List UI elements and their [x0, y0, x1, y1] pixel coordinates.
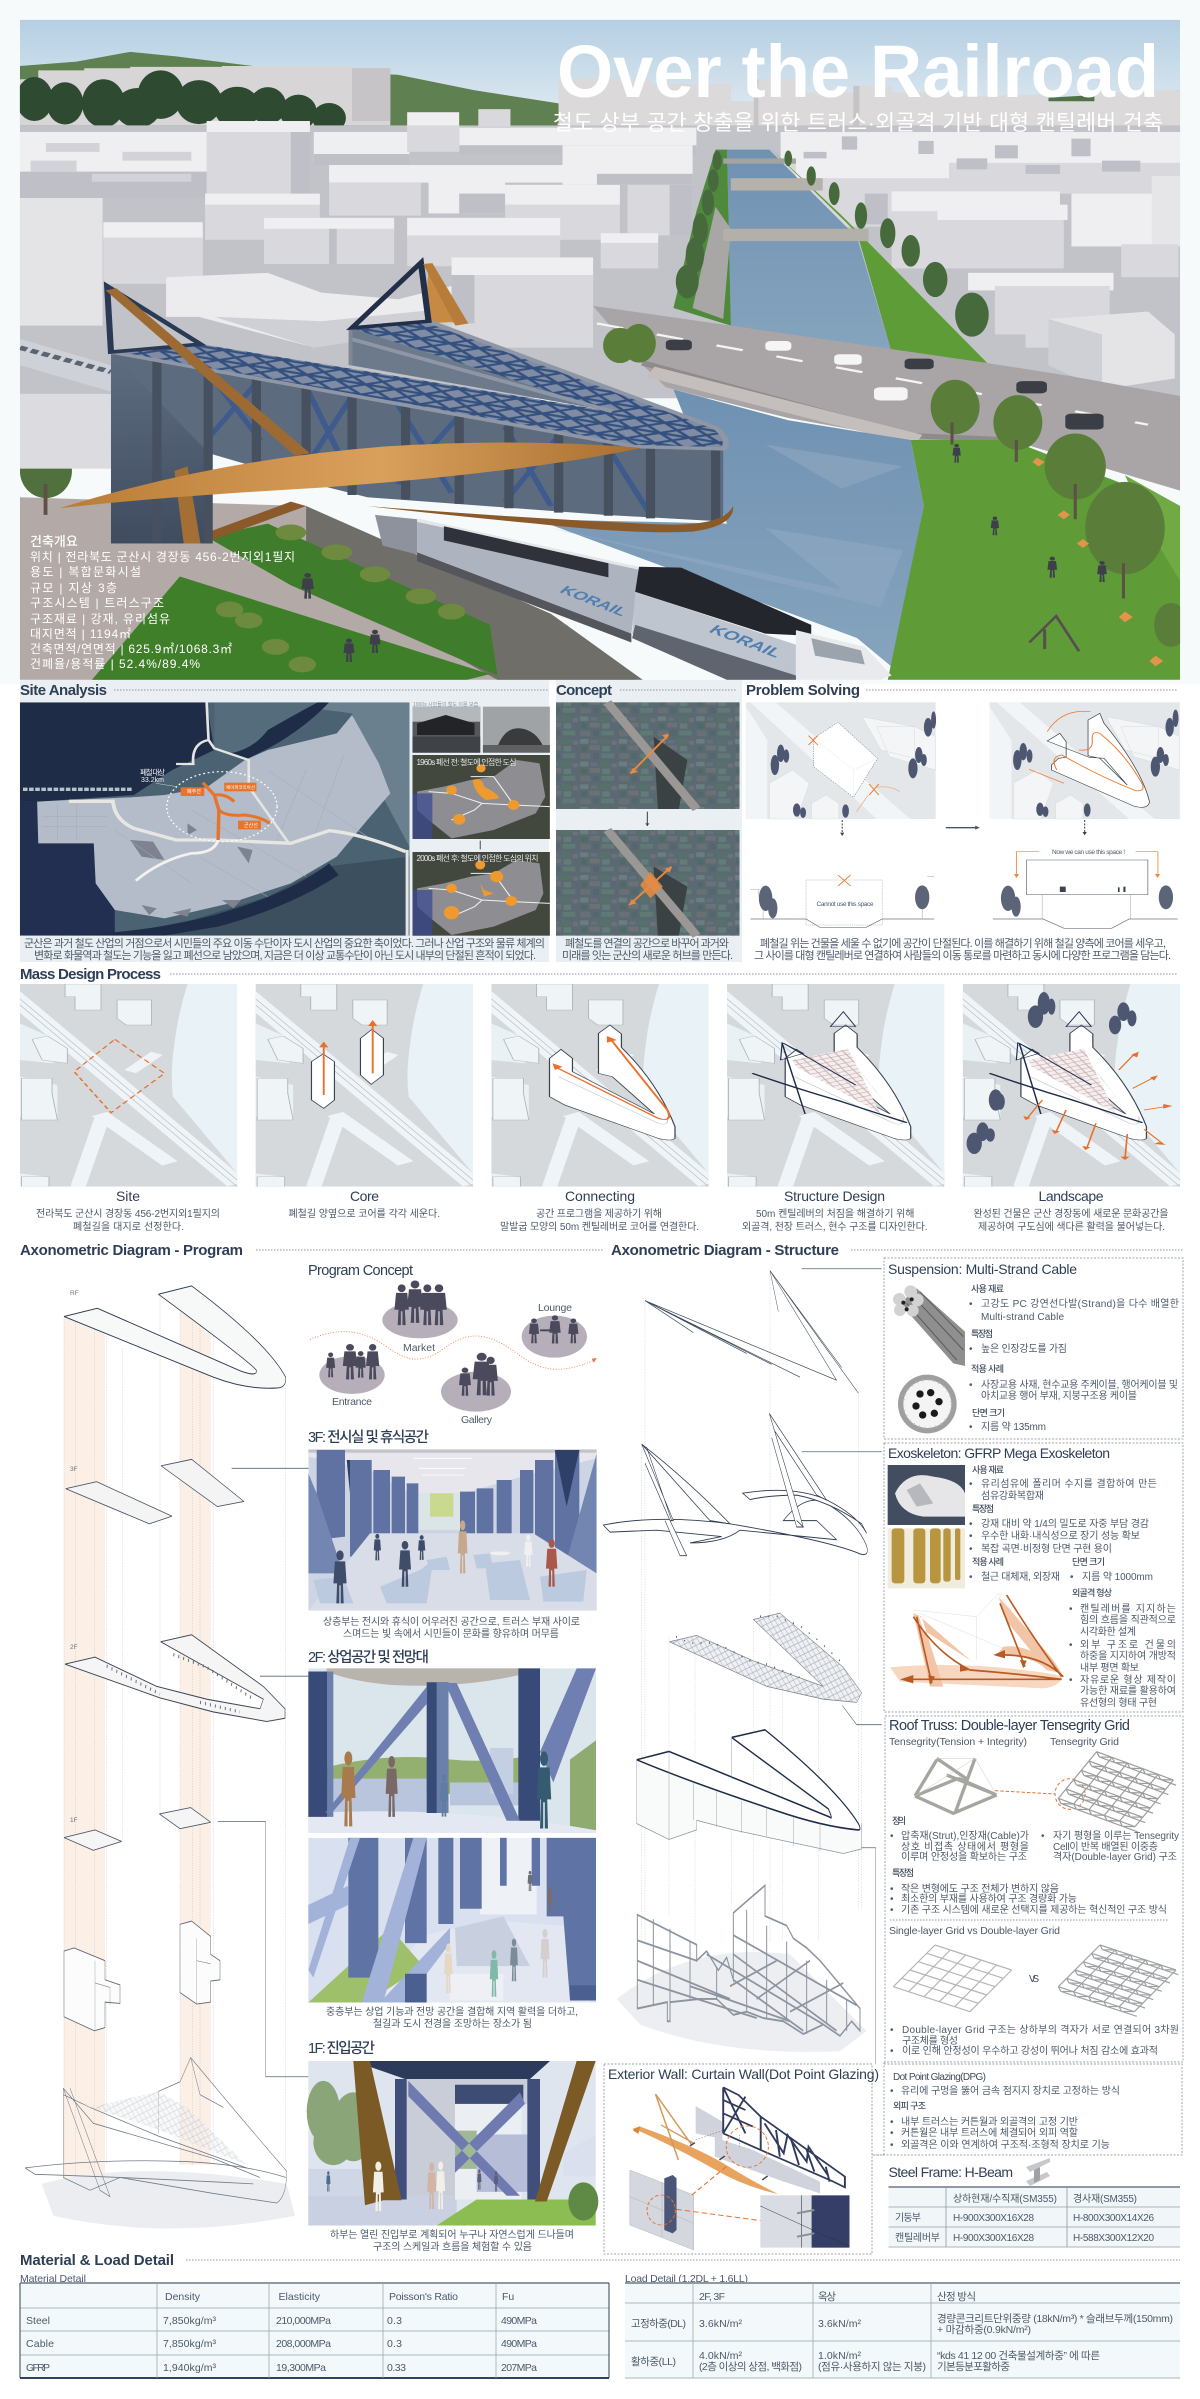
table: load detail: 옥상: [818, 2291, 836, 2303]
section A: [750, 919, 934, 927]
labels: mass design steps: 제공하여 구도심에 색다른 활력을 불어넣는다.: [978, 1220, 1165, 1233]
table: material detail: 7,850kg/m³: [163, 2315, 216, 2327]
map labels: 페이퍼코리아선: [226, 784, 255, 791]
table: material detail: Density: [165, 2291, 201, 2303]
text: exoskeleton: •: [969, 1544, 973, 1555]
subheadings and definition text: 구조체를 형성: [902, 2035, 958, 2047]
text: exoskeleton: [969, 1464, 1176, 1709]
table: steel sections: H-900X300X16X28: [953, 2233, 1034, 2244]
project overview text: [30, 534, 295, 671]
panel: axonometric diagram program: [20, 1242, 603, 2229]
table: steel sections: [888, 2187, 1180, 2247]
subheadings and definition text: 압축재(Strut),인장재(Cable)가: [901, 1829, 1029, 1842]
text: suspension: •: [969, 1344, 973, 1355]
caption: concept: 폐철도를 연결의 공간으로 바꾸어 과거와: [565, 937, 729, 950]
heading and caption: 3F: 스며드는 빛 속에서 시민들이 문화를 향유하며 머무름: [343, 1627, 559, 1640]
table: steel sections: H-588X300X12X20: [1073, 2233, 1154, 2244]
subheadings and definition text: •: [890, 1905, 894, 1916]
program concept illustration: [308, 1280, 597, 2201]
panel: mass design process: [8, 966, 1180, 1233]
right lawn: [888, 440, 1180, 680]
city buildings back: [20, 132, 207, 172]
table: steel sections: H-900X300X16X28: [953, 2213, 1034, 2224]
project overview text: 규모 | 지상 3층: [30, 581, 117, 595]
text: exoskeleton: 시각화한 설계: [1080, 1626, 1136, 1638]
panel: dot point glazing: 유리에 구멍을 뚫어 금속 점지지 장치로 고정하는 방식: [901, 2084, 1120, 2097]
text: exoskeleton: 캔틸레버를 지지하는: [1080, 1602, 1176, 1615]
panel: axonometric diagram structure: [603, 1242, 1183, 2064]
step: core: [243, 984, 473, 1187]
table: load detail: + 마감하중(0.9kN/m²): [937, 2323, 1031, 2336]
map labels: 폐주선: [187, 788, 201, 795]
panel: dot point glazing: 외피 구조: [893, 2101, 926, 2111]
heading: program concept: Program Concept: [308, 1263, 413, 1279]
exploded program axonometric: [25, 1285, 308, 2228]
table: material detail: Elasticity: [278, 2291, 321, 2303]
cores: [64, 1948, 120, 2031]
table: material detail: Steel: [26, 2315, 50, 2327]
exploded structure axonometric: [602, 1268, 882, 2064]
labels: program stages: Lounge: [538, 1302, 572, 1314]
text: suspension: •: [969, 1422, 973, 1433]
text: exoskeleton: 사용 재료: [972, 1464, 1004, 1475]
floor labels: RF: [70, 1290, 79, 1297]
curtain wall exploded diagram: [630, 2086, 850, 2250]
table: material detail: 19,300MPa: [276, 2362, 326, 2374]
heading and caption: 1F: 하부는 열린 진입부로 계획되어 누구나 자연스럽게 드나들며: [330, 2228, 574, 2241]
caption: problem solving: 그 사이를 대형 캔틸레버로 연결하여 사람들의 이동 통로를 마련하고 동시에 다양한 프로그램을 담는다.: [754, 948, 1171, 962]
map labels: [140, 767, 258, 829]
site history insets: [412, 706, 550, 936]
subheadings and definition text: Tensegrity Grid: [1050, 1736, 1119, 1748]
table: steel sections: H-800X300X14X26: [1073, 2213, 1154, 2224]
subheadings and definition text: 작은 변형에도 구조 전체가 변하지 않음: [901, 1882, 1059, 1895]
table: material detail: 0.33: [387, 2362, 406, 2374]
heading: concept: Concept: [556, 682, 612, 699]
heading: suspension: Suspension: Multi-Strand Cable: [888, 1261, 1077, 1277]
labels: mass design steps: [36, 1188, 1168, 1233]
subheadings and definition text: VS: [1029, 1974, 1039, 1985]
roof grid: [669, 1613, 862, 1702]
table: load detail: 3.6kN/m²: [818, 2318, 862, 2330]
caption: concept: 미래를 잇는 군산의 새로운 허브를 만든다.: [562, 949, 733, 962]
text: exoskeleton: •: [969, 1519, 973, 1530]
labels: program stages: Entrance: [332, 1396, 372, 1408]
tensegrity and grid diagrams: [893, 1751, 1178, 2017]
subheadings and definition text: [889, 1736, 1179, 2057]
panel: dot point glazing: [872, 2062, 1182, 2155]
labels: mass design steps: 말발굽 모양의 50m 켄틸레버로 코어를 연결한다.: [500, 1220, 699, 1233]
diagram labels: Cannot use this space: [816, 901, 874, 908]
table: load detail: 경량콘크리트단위중량 (18kN/m³) * 슬래브두께(150mm): [937, 2312, 1173, 2325]
table: material detail: [20, 2273, 609, 2378]
heading and caption: 2F: 중층부는 상업 기능과 전망 공간을 결합해 지역 활력을 더하고,: [326, 2005, 578, 2018]
project overview text: 건축면적/연면적 | 625.9㎡/1068.3㎡: [30, 642, 232, 656]
panel: roof truss: [885, 1716, 1183, 2062]
3F image: [308, 1449, 597, 1611]
labels: mass design steps: 50m 켄틸레버의 처짐을 해결하기 위해: [756, 1207, 914, 1220]
text: exoskeleton: 우수한 내화·내식성으로 장기 성능 확보: [981, 1530, 1140, 1542]
1F entrance view: [307, 2061, 598, 2226]
labels: mass design steps: Landscape: [1038, 1188, 1104, 1204]
table: load detail: 1.0kN/m²: [818, 2350, 862, 2362]
heading: problem solving: Problem Solving: [746, 682, 860, 699]
panel: exoskeleton: [884, 1443, 1183, 1712]
caption: problem solving: [754, 936, 1171, 962]
exoskeleton: [603, 1413, 867, 1556]
project overview text: 건폐율/용적률 | 52.4%/89.4%: [30, 657, 200, 671]
text: exoskeleton: 힘의 흐름을 직관적으로: [1080, 1614, 1176, 1626]
train: [375, 515, 417, 554]
text: exoskeleton: 강재 대비 약 1/4의 밀도로 자중 부담 경감: [981, 1517, 1149, 1530]
heading: roof truss: Roof Truss: Double-layer Tensegrity Grid: [889, 1718, 1130, 1734]
caption: concept: [562, 937, 733, 962]
subheadings and definition text: •: [890, 2046, 894, 2057]
floor labels: [70, 1290, 79, 1824]
ground shadow: [42, 2171, 295, 2229]
panel: program concept: [308, 1263, 597, 1611]
table: load detail: 기본등분포활하중: [937, 2360, 1010, 2373]
labels: mass design steps: 폐철길 양옆으로 코어를 각각 세운다.: [288, 1207, 440, 1220]
table: material detail: 210,000MPa: [276, 2315, 331, 2327]
curtain wall: [637, 1730, 861, 1854]
text: suspension: 적용 사례: [971, 1363, 1004, 1374]
subheadings and definition text: 상호 비접촉 상태에서 평형을: [901, 1841, 1029, 1853]
mass design diagrams: [20, 984, 1180, 1187]
exoskeleton back & building: [425, 273, 454, 323]
panel: material and load detail: [20, 2252, 1180, 2378]
subheadings and definition text: •: [890, 1884, 894, 1895]
table: material detail: Fu: [502, 2291, 514, 2303]
text: suspension: •: [969, 1380, 973, 1391]
hero rendering panel: KORAIL: [705, 622, 787, 660]
text: suspension: [969, 1283, 1179, 1433]
caption: site analysis: 군산은 과거 철도 산업의 거점으로서 시민들의 주요 이동 수단이자 도시 산업의 중요한 축이었다. 그러나 산업 구조와 물류 체계의: [24, 937, 545, 950]
problem and solution diagrams: [746, 702, 1180, 929]
heading: steel frame: Steel Frame: H-Beam: [888, 2164, 1013, 2180]
table: material detail: 490MPa: [501, 2338, 537, 2350]
panel: dot point glazing: •: [890, 2128, 894, 2139]
subheadings and definition text: •: [890, 1894, 894, 1905]
text: exoskeleton: •: [969, 1572, 973, 1583]
river upstream: [727, 150, 892, 352]
table: material detail: 490MPa: [501, 2315, 537, 2327]
text: exoskeleton: 지름 약 1000mm: [1082, 1571, 1153, 1583]
inner steel frame: [617, 1952, 867, 2052]
subheadings and definition text: Double-layer Grid 구조는 상하부의 격자가 서로 연결되어 3차원: [902, 2023, 1179, 2036]
text: exoskeleton: 단면 크기: [1072, 1556, 1105, 1567]
whole building outline: [25, 2058, 287, 2203]
heading and caption: 3F: 3F: 전시실 및 휴식공간: [308, 1429, 429, 1446]
table: load detail: “kds 41 12 00 건축물설계하중” 에 따른: [937, 2349, 1100, 2362]
subheadings and definition text: Cell이 반복 배열된 이중층: [1053, 1841, 1158, 1853]
table: load detail: 3.6kN/m²: [699, 2318, 742, 2330]
project overview text: 구조재료 | 강재, 유리섬유: [30, 612, 170, 626]
project overview text: 위치 | 전라북도 군산시 경장동 456-2번지외1필지: [30, 550, 295, 564]
title: Over the Railroad: [557, 30, 1159, 113]
table: material detail: 208,000MPa: [276, 2338, 331, 2350]
floor labels: 2F: [70, 1644, 78, 1651]
labels: mass design steps: Site: [116, 1188, 140, 1204]
labels: mass design steps: Core: [350, 1188, 379, 1204]
text: exoskeleton: •: [969, 1531, 973, 1542]
heading and caption: 2F: 2F: 상업공간 및 전망대: [308, 1649, 429, 1666]
table: material detail: Cable: [26, 2338, 54, 2350]
heading and caption: 1F: 1F: 진입공간: [308, 2040, 375, 2057]
table: steel sections: 기둥부: [895, 2212, 921, 2224]
RF plate: [64, 1286, 286, 1388]
text: suspension: 단면 크기: [972, 1407, 1005, 1418]
panel: exterior wall: [604, 2064, 879, 2254]
floor labels: 1F: [70, 1817, 78, 1824]
subheadings and definition text: 격자(Double-layer Grid) 구조: [1053, 1850, 1177, 1863]
hero rendering panel: [16, 20, 1188, 680]
text: exoskeleton: 자유로운 형상 제작이: [1080, 1674, 1176, 1686]
2F terrace view: [308, 1668, 596, 1833]
heading: exoskeleton: Exoskeleton: GFRP Mega Exoskeleton: [888, 1445, 1110, 1461]
text: suspension: 높은 인장강도를 가짐: [981, 1343, 1067, 1355]
text: suspension: 사장교용 사재, 현수교용 주케이블, 행어케이블 및: [981, 1379, 1178, 1391]
lower left site: [20, 497, 635, 680]
table: load detail: 산정 방식: [937, 2291, 976, 2303]
table: load detail: (점유·사용하지 않는 지붕): [818, 2360, 926, 2373]
inset captions: [413, 701, 538, 863]
table: load detail: [625, 2273, 1180, 2378]
hero rendering panel: KORAIL: [556, 584, 632, 619]
subheadings and definition text: 이루며 안정성을 확보하는 구조: [901, 1850, 1027, 1863]
city buildings right: [780, 132, 1180, 163]
table: material detail: 7,850kg/m³: [163, 2338, 216, 2350]
panel: steel frame table: [888, 2158, 1180, 2247]
inset captions: 1960s 시민들의 철도 이용 모습: [413, 701, 479, 708]
text: exoskeleton: 가능한 재료를 활용하여: [1080, 1684, 1176, 1697]
project overview text: 용도 | 복합문화시설: [30, 565, 141, 579]
river lower: [536, 389, 924, 667]
heading: axonometric program: Axonometric Diagram - Program: [20, 1242, 243, 1259]
panel: problem solving: [746, 682, 1180, 962]
table: load detail: 4.0kN/m²: [699, 2350, 742, 2362]
2F plate: [65, 1635, 285, 1722]
table: material detail: 1,940kg/m³: [163, 2362, 216, 2374]
subheadings and definition text: •: [890, 1831, 894, 1842]
text: exoskeleton: •: [1069, 1640, 1073, 1651]
inset captions: 1960s 폐선 전: 철도에 인접한 도심: [416, 757, 516, 767]
table: load detail: (2층 이상의 상점, 백화점): [699, 2361, 802, 2373]
panel: site analysis: [20, 680, 550, 962]
text: exoskeleton: 내부 평면 확보: [1080, 1662, 1139, 1674]
map labels: 폐철 대상: [140, 767, 165, 777]
panel: concept: [556, 680, 742, 962]
subheadings and definition text: Tensegrity(Tension + Integrity): [889, 1736, 1027, 1748]
project overview text: 건축개요: [30, 534, 78, 549]
section B: [993, 919, 1178, 928]
text: exoskeleton: 외부 구조로 건물의: [1080, 1639, 1176, 1651]
heading and caption: 2F: [308, 1649, 578, 2030]
subheadings and definition text: •: [1041, 1831, 1045, 1842]
heading: site analysis: Site Analysis: [20, 682, 107, 699]
subheadings and definition text: 정의: [892, 1815, 906, 1826]
subheadings and definition text: •: [890, 2025, 894, 2036]
project overview text: 구조시스템 | 트러스구조: [30, 596, 164, 610]
table: steel sections: 상하현재/수직재(SM355): [953, 2192, 1057, 2205]
heading: exterior wall: Exterior Wall: Curtain Wall(Dot Point Glazing): [608, 2066, 879, 2082]
project overview text: 대지면적 | 1194㎡: [30, 627, 131, 641]
labels: program stages: Market: [403, 1342, 435, 1354]
map labels: 군산선: [244, 822, 258, 829]
photos and force diagram: [888, 1465, 1064, 1688]
text: exoskeleton: 유선형의 형태 구현: [1080, 1697, 1157, 1709]
subtitle: 철도 상부 공간 창출을 위한 트러스·외골격 기반 대형 캔틸레버 건축: [553, 111, 1163, 135]
subheadings and definition text: 최소한의 부재를 사용하여 구조 경량화 가능: [901, 1892, 1077, 1905]
caption: problem solving: 폐철길 위는 건물을 세울 수 없기에 공간이 단절된다. 이를 해결하기 위해 철길 양측에 코어를 세우고,: [760, 936, 1166, 950]
panel: suspension cable: [884, 1258, 1183, 1439]
step: site: [8, 984, 237, 1187]
3F plates: [66, 1459, 244, 1524]
text: exoskeleton: 적용 사례: [972, 1556, 1004, 1567]
labels: program stages: Gallery: [461, 1414, 493, 1426]
inset captions: 2000s 폐선 후: 철도에 인접한 도심의 위치: [416, 853, 538, 863]
cables: [645, 1271, 858, 1393]
text: exoskeleton: •: [1070, 1572, 1074, 1583]
text: suspension: •: [969, 1299, 973, 1310]
table: material detail: Poisson's Ratio: [389, 2291, 458, 2303]
caption: site analysis: [24, 937, 545, 962]
heading: mass design process: Mass Design Process: [20, 966, 161, 983]
heading and caption: 1F: 구조의 스케일과 흐름을 체험할 수 있음: [373, 2241, 532, 2253]
text: exoskeleton: 철근 대체재, 외장재: [981, 1571, 1060, 1583]
interior images 2F and 1F: [306, 1668, 598, 2226]
labels: mass design steps: 전라북도 군산시 경장동 456-2번지외1필지의: [36, 1207, 220, 1220]
table: material detail: 0.3: [387, 2338, 402, 2350]
labels: mass design steps: 공간 프로그램을 제공하기 위해: [536, 1207, 662, 1220]
subheadings and definition text: 이로 인해 안정성이 우수하고 강성이 뛰어나 처짐 감소에 효과적: [902, 2044, 1158, 2057]
table: load detail: 2F, 3F: [699, 2291, 725, 2303]
table: load detail: 활하중(LL): [631, 2355, 676, 2368]
text: suspension: Multi-strand Cable: [981, 1312, 1064, 1323]
floor labels: 3F: [70, 1466, 78, 1473]
table: material detail: 0.3: [387, 2315, 402, 2327]
panel: dot point glazing: 내부 트러스는 커튼월과 외골격의 고정 기반: [901, 2115, 1078, 2128]
labels: mass design steps: Connecting: [565, 1188, 635, 1204]
panel: dot point glazing: •: [890, 2117, 894, 2128]
subheadings and definition text: Single-layer Grid vs Double-layer Grid: [889, 1925, 1060, 1937]
leader lines: [802, 1269, 882, 2064]
panel: dot point glazing: •: [890, 2086, 894, 2097]
text: suspension: 고강도 PC 강연선다발(Strand)을 다수 배열한: [981, 1298, 1179, 1310]
step: landscape: [951, 984, 1180, 1187]
step: connecting: [479, 984, 709, 1187]
panel: dot point glazing: 커튼월은 내부 트러스에 체결되어 외피 역할: [901, 2127, 1078, 2139]
diagram labels: [816, 849, 1125, 908]
heading and caption: 3F: 상층부는 전시와 휴식이 어우러진 공간으로, 트러스 부재 사이로: [323, 1616, 580, 1628]
table: steel sections: 캔틸레버부: [895, 2231, 940, 2244]
subheadings and definition text: 자기 평형을 이루는 Tensegrity: [1053, 1830, 1179, 1842]
subheadings and definition text: 기존 구조 시스템에 새로운 선택지를 제공하는 혁신적인 구조 방식: [901, 1903, 1167, 1916]
site map: [20, 702, 410, 936]
icons: cable: [893, 1285, 965, 1434]
text: exoskeleton: 유리섬유에 폴리머 수지를 결합하여 만든: [981, 1477, 1157, 1490]
text: suspension: 아치교용 행어 부재, 지붕구조용 케이블: [981, 1390, 1137, 1402]
panel: dot point glazing: Dot Point Glazing(DPG): [893, 2072, 986, 2083]
labels: program stages: [332, 1302, 572, 1426]
table: load detail: Load Detail (1.2DL + 1.6LL): [625, 2273, 748, 2285]
step: structure design: [715, 984, 944, 1187]
text: exoskeleton: •: [1069, 1604, 1073, 1615]
heading and caption: 3F: [308, 1429, 580, 1640]
heading and caption: 2F: 철길과 도시 전경을 조망하는 장소가 됨: [373, 2017, 532, 2030]
panel: dot point glazing: •: [890, 2140, 894, 2151]
road: [593, 306, 1180, 491]
heading: material and load: Material & Load Detail: [20, 2252, 174, 2269]
labels: mass design steps: 외골격, 천장 트러스, 현수 구조를 디자인한다.: [742, 1220, 928, 1233]
concept aerial images: [556, 700, 740, 938]
heading and caption: 1F: [308, 2040, 574, 2253]
text: suspension: 지름 약 135mm: [981, 1421, 1046, 1433]
labels: mass design steps: Structure Design: [784, 1188, 885, 1204]
text: exoskeleton: 외골격 형상: [1072, 1587, 1112, 1598]
table: steel sections: 경사재(SM355): [1073, 2192, 1137, 2205]
1F plates: [64, 1808, 211, 1850]
text: suspension: 사용 재료: [971, 1283, 1004, 1294]
text: suspension: 특장점: [971, 1328, 993, 1339]
table: material detail: GFRP: [26, 2362, 50, 2374]
labels: mass design steps: 완성된 건물은 군산 경장동에 새로운 문화공간을: [974, 1207, 1168, 1220]
table: material detail: 207MPa: [501, 2362, 537, 2374]
heading: axonometric structure: Axonometric Diagram - Structure: [611, 1242, 839, 1259]
text: exoskeleton: •: [1069, 1675, 1073, 1686]
icon: H-beam: [1026, 2158, 1050, 2186]
2F market view: [308, 1838, 596, 2002]
panel: dot point glazing: 외골격은 이와 연계하여 구조적·조형적 장치로 기능: [901, 2138, 1110, 2151]
caption: site analysis: 변화로 화물역과 철도는 기능을 잃고 폐선으로 남았으며, 지금은 더 이상 교통수단이 아닌 도시 내부의 단절된 흔적이 되었다.: [34, 948, 536, 962]
text: exoskeleton: 특장점: [972, 1503, 994, 1514]
table: load detail: 고정하중(DL): [631, 2317, 686, 2330]
text: exoskeleton: 복잡 곡면·비정형 단면 구현 용이: [981, 1543, 1112, 1555]
labels: mass design steps: 폐철길을 대지로 선정한다.: [73, 1220, 184, 1233]
diagram labels: Now we can use this space !: [1052, 849, 1125, 856]
map labels: 33.2km: [141, 777, 164, 784]
text: exoskeleton: •: [969, 1479, 973, 1490]
text: exoskeleton: 섬유강화복합재: [981, 1490, 1044, 1502]
text: exoskeleton: 하중을 지지하여 개방적: [1080, 1649, 1176, 1662]
table: material detail: Material Detail: [20, 2273, 86, 2285]
subheadings and definition text: 특장점: [892, 1867, 914, 1878]
